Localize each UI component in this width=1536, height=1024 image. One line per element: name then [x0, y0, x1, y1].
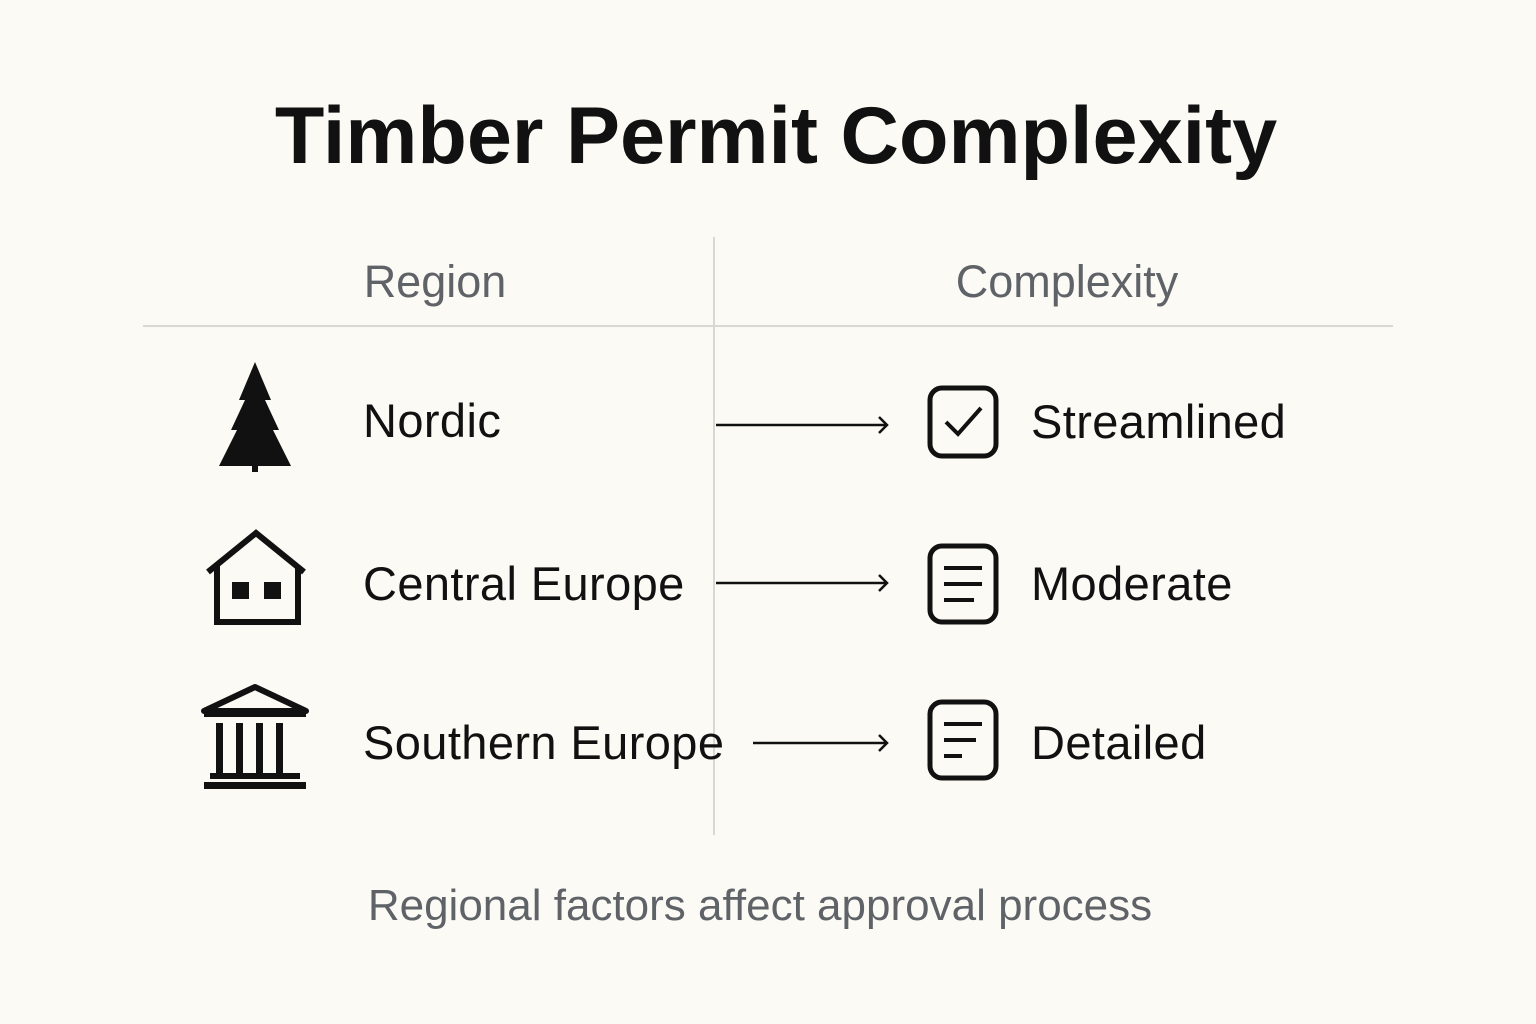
label: Detailed: Detailed: [1031, 716, 1207, 769]
icon: check box: [928, 386, 998, 458]
icon: document moderate: [928, 544, 998, 624]
header: Region: Region: [364, 256, 506, 307]
icon: building: [201, 684, 309, 789]
title: Timber Permit Complexity: [275, 91, 1277, 181]
label: Nordic: Nordic: [363, 394, 501, 447]
label: Moderate: Moderate: [1031, 557, 1233, 610]
label: Central Europe: Central Europe: [363, 557, 685, 610]
footer caption: Regional factors affect approval process: [368, 881, 1152, 930]
header: Complexity: Complexity: [956, 256, 1178, 307]
icon: tree: [219, 362, 291, 472]
label: Southern Europe: Southern Europe: [363, 716, 724, 769]
icon: house: [206, 529, 306, 625]
label: Streamlined: Streamlined: [1031, 395, 1286, 448]
icon: document detailed: [928, 700, 998, 780]
